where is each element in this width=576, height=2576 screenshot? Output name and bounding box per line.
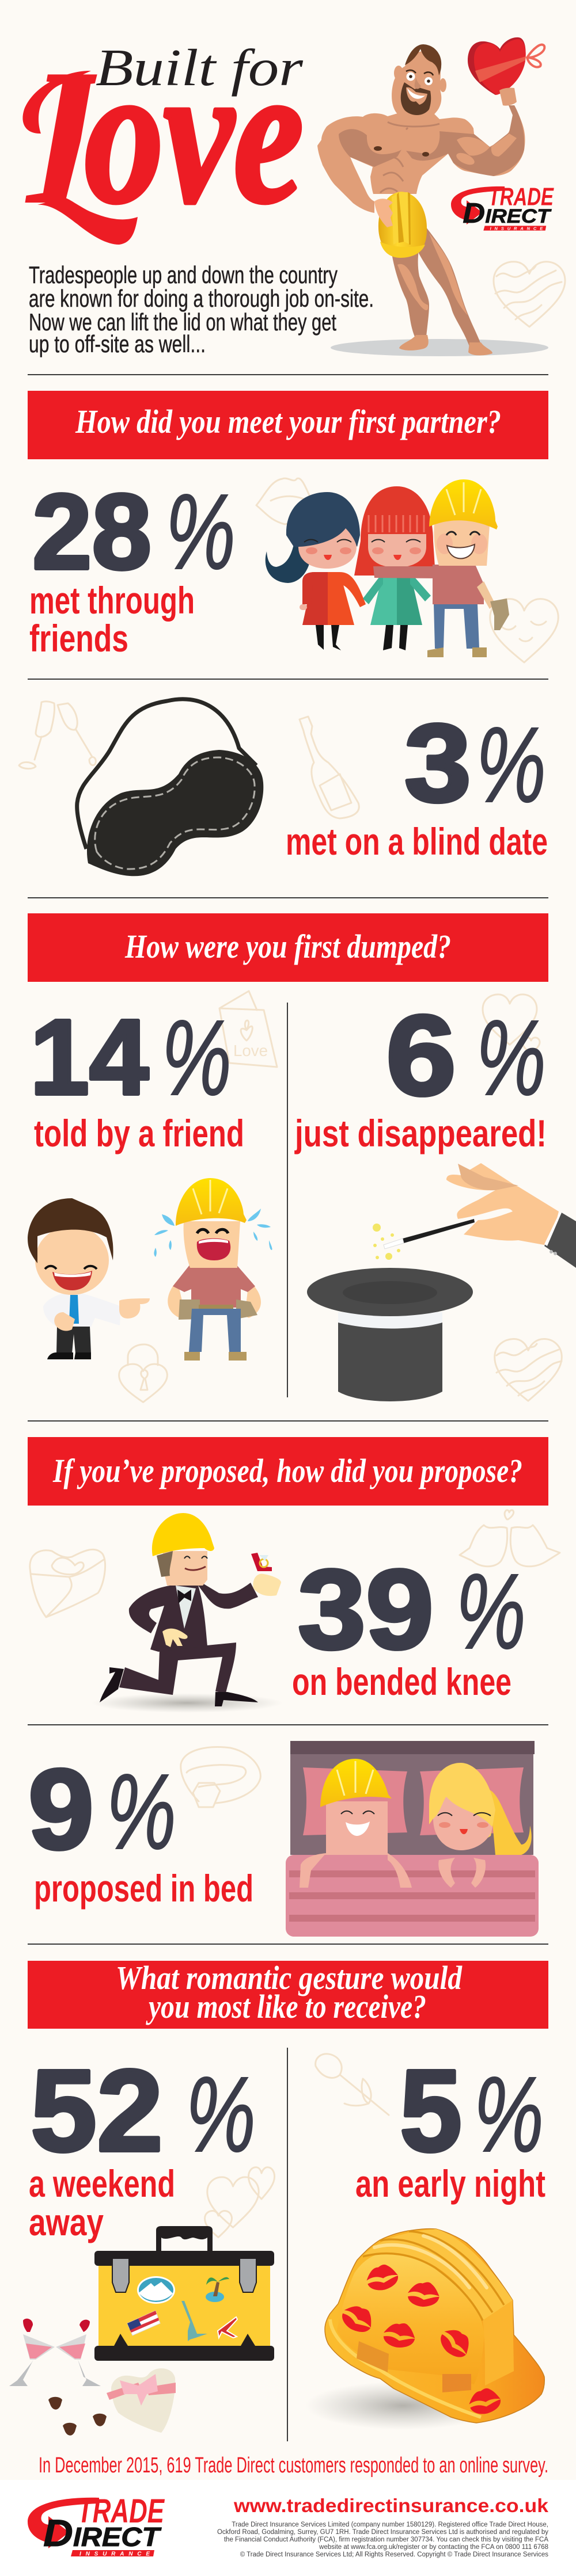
head [392, 44, 446, 120]
banner: How did you meet your first partner?: How did you meet your first partner? [75, 403, 501, 440]
stat: 14% told by a friend [30, 998, 244, 1154]
pillows [303, 1767, 407, 1835]
banner: If you've proposed, how did you propose? [28, 1437, 548, 1506]
red heart gift [468, 37, 544, 106]
helmet dome [337, 2253, 484, 2384]
stat: 52% a weekend away [29, 2045, 256, 2243]
clips [357, 2341, 389, 2372]
percent sign: % [106, 1752, 176, 1872]
icon: chocolates [48, 2397, 107, 2436]
label: told by a friend [34, 1112, 244, 1154]
illustration: couple in bed [286, 1741, 539, 1937]
helmet brim and shell [325, 2229, 544, 2423]
stat: 9% proposed in bed [28, 1746, 253, 1910]
percent sign: % [161, 999, 232, 1118]
right arm shading [406, 105, 524, 176]
ring box [251, 1553, 272, 1571]
body silhouette [317, 105, 525, 213]
stat: 28% met through friends: friends [29, 617, 128, 660]
banner: What romantic gesture would you most like to receive? [28, 1959, 548, 2029]
percent sign: % [476, 706, 546, 825]
handle [156, 2226, 213, 2251]
face [162, 1551, 207, 1586]
icon: doodle heart face [490, 599, 558, 662]
shadow under tradesman [331, 339, 548, 356]
icon: doodle heart gift box [30, 1549, 105, 1617]
logo: Trade Direct small: INSURANCE [490, 226, 543, 231]
brim highlight [330, 2319, 481, 2417]
intro text: Now we can lift the lid on what they get [29, 308, 336, 336]
hard hat [152, 1513, 214, 1556]
percent sign: % [473, 2055, 544, 2174]
number 39: 39 [298, 1546, 434, 1672]
illustration: worker proposing on one knee [92, 1513, 283, 1713]
number 52: 52 [31, 2045, 163, 2175]
number 5: 5 [400, 2045, 462, 2175]
number 28: 28 [32, 472, 151, 592]
nipples [374, 146, 429, 157]
title: Love: L [24, 28, 146, 245]
shoes [100, 1667, 124, 1702]
icon: doodle champagne glasses [19, 702, 96, 769]
banner: What romantic gesture would you most like to receive?: What romantic gesture would [116, 1959, 463, 1996]
illustration: hard hat covered in kisses [305, 2229, 544, 2430]
stat: 6% just disappeared! [294, 992, 547, 1154]
illustration: three friends [266, 479, 509, 657]
logo: Trade Direct small [451, 183, 554, 231]
percent sign: % [185, 2055, 256, 2174]
clasps [112, 2258, 129, 2292]
blanket [286, 1855, 539, 1937]
sticker: plane [218, 2317, 237, 2338]
strap [77, 699, 256, 849]
tears [154, 1209, 272, 1257]
illustration: yellow suitcase [94, 2226, 274, 2361]
legal text: website at www.fca.org.uk/register or by contacting the FCA on 0800 111 6768 [319, 2544, 548, 2551]
illustration: black top hat [307, 1268, 473, 1401]
logo: Trade Direct footer: INSURANCE [79, 2551, 150, 2558]
legal text [217, 2521, 548, 2558]
icon: cocktail glasses [9, 2319, 101, 2386]
wand [403, 1219, 475, 1243]
number 6: 6 [386, 992, 456, 1119]
legal text: © Trade Direct Insurance Services Ltd; All Rights Reserved. Copyright © Trade Direct Insurance Services [240, 2551, 548, 2558]
stitching [95, 757, 255, 869]
website URL: www.tradedirectinsurance.co.uk [233, 2495, 549, 2516]
icon: doodle hearts [483, 994, 540, 1053]
icon: doodle heart padlock [119, 1344, 167, 1402]
label: a weekend [29, 2162, 175, 2205]
legs and feet [392, 227, 492, 356]
illustration: muscular tradesman holding heart [317, 37, 554, 356]
label: on bended knee [292, 1660, 511, 1703]
intro text: up to off-site as well... [29, 330, 206, 357]
stat: 5% an early night [355, 2045, 545, 2205]
arms over blanket [300, 1853, 412, 1888]
kisses [338, 2263, 502, 2416]
number 3: 3 [404, 701, 471, 825]
yellow helmet [374, 192, 427, 258]
icon: doodle lips [256, 478, 312, 524]
banner: How were you first dumped?: How were you first dumped? [124, 928, 451, 965]
worker friend [373, 479, 509, 657]
icon: doodle wavy heart [495, 1339, 562, 1401]
icon: doodle love card: Love [233, 1042, 268, 1060]
sticker: flag [127, 2311, 160, 2335]
mask body [87, 750, 263, 876]
legal text: Trade Direct Insurance Services Limited (company number 1580129). Registered office Trade Direct House, [232, 2521, 548, 2528]
shadow [305, 2381, 501, 2430]
icon: black sleep mask [77, 699, 263, 876]
label: met through [29, 579, 195, 622]
title: Love [22, 71, 302, 245]
illustration: crying worker [154, 1178, 272, 1361]
intro text [29, 261, 374, 357]
icon: doodle love birds [460, 1510, 560, 1567]
trousers [119, 1643, 236, 1695]
headboard [290, 1741, 535, 1754]
sticker: palm island [206, 2277, 229, 2302]
man in bed [300, 1759, 412, 1888]
arm highlights [454, 134, 517, 167]
title: Love: ove [85, 24, 304, 244]
icon: doodle ring [181, 1747, 260, 1807]
logo: Trade Direct small: TRADE [488, 183, 554, 211]
icon: doodle heart top [494, 262, 565, 327]
hands [162, 1629, 188, 1647]
number 14: 14 [30, 998, 149, 1117]
icon: doodle hearts pair [205, 2167, 275, 2238]
stat: 28% met through friends [29, 472, 236, 660]
banner: How were you first dumped? [28, 913, 548, 982]
logo: Trade Direct footer: DIRECT [43, 2512, 162, 2554]
number 9: 9 [28, 1746, 94, 1873]
woman in bed [429, 1763, 532, 1885]
top and bottom bars [94, 2251, 274, 2266]
illustration: laughing businessman [28, 1198, 150, 1359]
icon: heart box with ribbon [107, 2368, 176, 2433]
banner: How did you meet your first partner? [28, 391, 548, 459]
girl with blue hair [266, 492, 366, 650]
legal text: Ockford Road, Godalming, Surrey, GU7 1RH. Trade Direct Insurance Services Ltd is authorised and regulated by [217, 2529, 548, 2536]
logo: Trade Direct footer [28, 2493, 165, 2558]
corner triangles [114, 2334, 255, 2346]
side panel [483, 2300, 514, 2386]
sticker: mountain [137, 2276, 175, 2304]
label: proposed in bed [34, 1867, 253, 1910]
percent sign: % [476, 999, 546, 1118]
sticker: eiffel tower [181, 2301, 207, 2341]
illustration: magician hand with wand [373, 1163, 576, 1268]
abs lines [380, 122, 439, 193]
stat: 52% a weekend away: away [29, 2201, 104, 2243]
logo: Trade Direct small: DIRECT [463, 197, 552, 229]
ridge band [364, 2229, 513, 2320]
case body [98, 2266, 270, 2346]
girl with red hair [354, 486, 435, 650]
icon: doodle champagne bottle [300, 717, 359, 818]
intro text: Tradespeople up and down the country [29, 261, 338, 288]
stat: 39% on bended knee [292, 1546, 526, 1703]
percent sign: % [165, 472, 236, 592]
logo: Trade Direct footer: TRADE [77, 2493, 165, 2530]
banner: What romantic gesture would you most like to receive?: you most like to receive? [146, 1988, 426, 2025]
legal text: the Financial Conduct Authority (FCA), firm registration number 307734. You can check this by visiting the FCA [224, 2536, 548, 2543]
icon: doodle love card [219, 991, 277, 1067]
icon: doodle rose [316, 2054, 389, 2115]
intro text: are known for doing a thorough job on-site. [29, 285, 374, 312]
percent sign: % [456, 1552, 526, 1671]
sparkles [373, 1224, 400, 1260]
ground shadow [92, 1693, 283, 1713]
stat: 3% met on a blind date [286, 701, 548, 863]
left side muscle shading [339, 129, 401, 167]
title: Built for: Built for [96, 39, 304, 97]
jacket [129, 1586, 207, 1652]
